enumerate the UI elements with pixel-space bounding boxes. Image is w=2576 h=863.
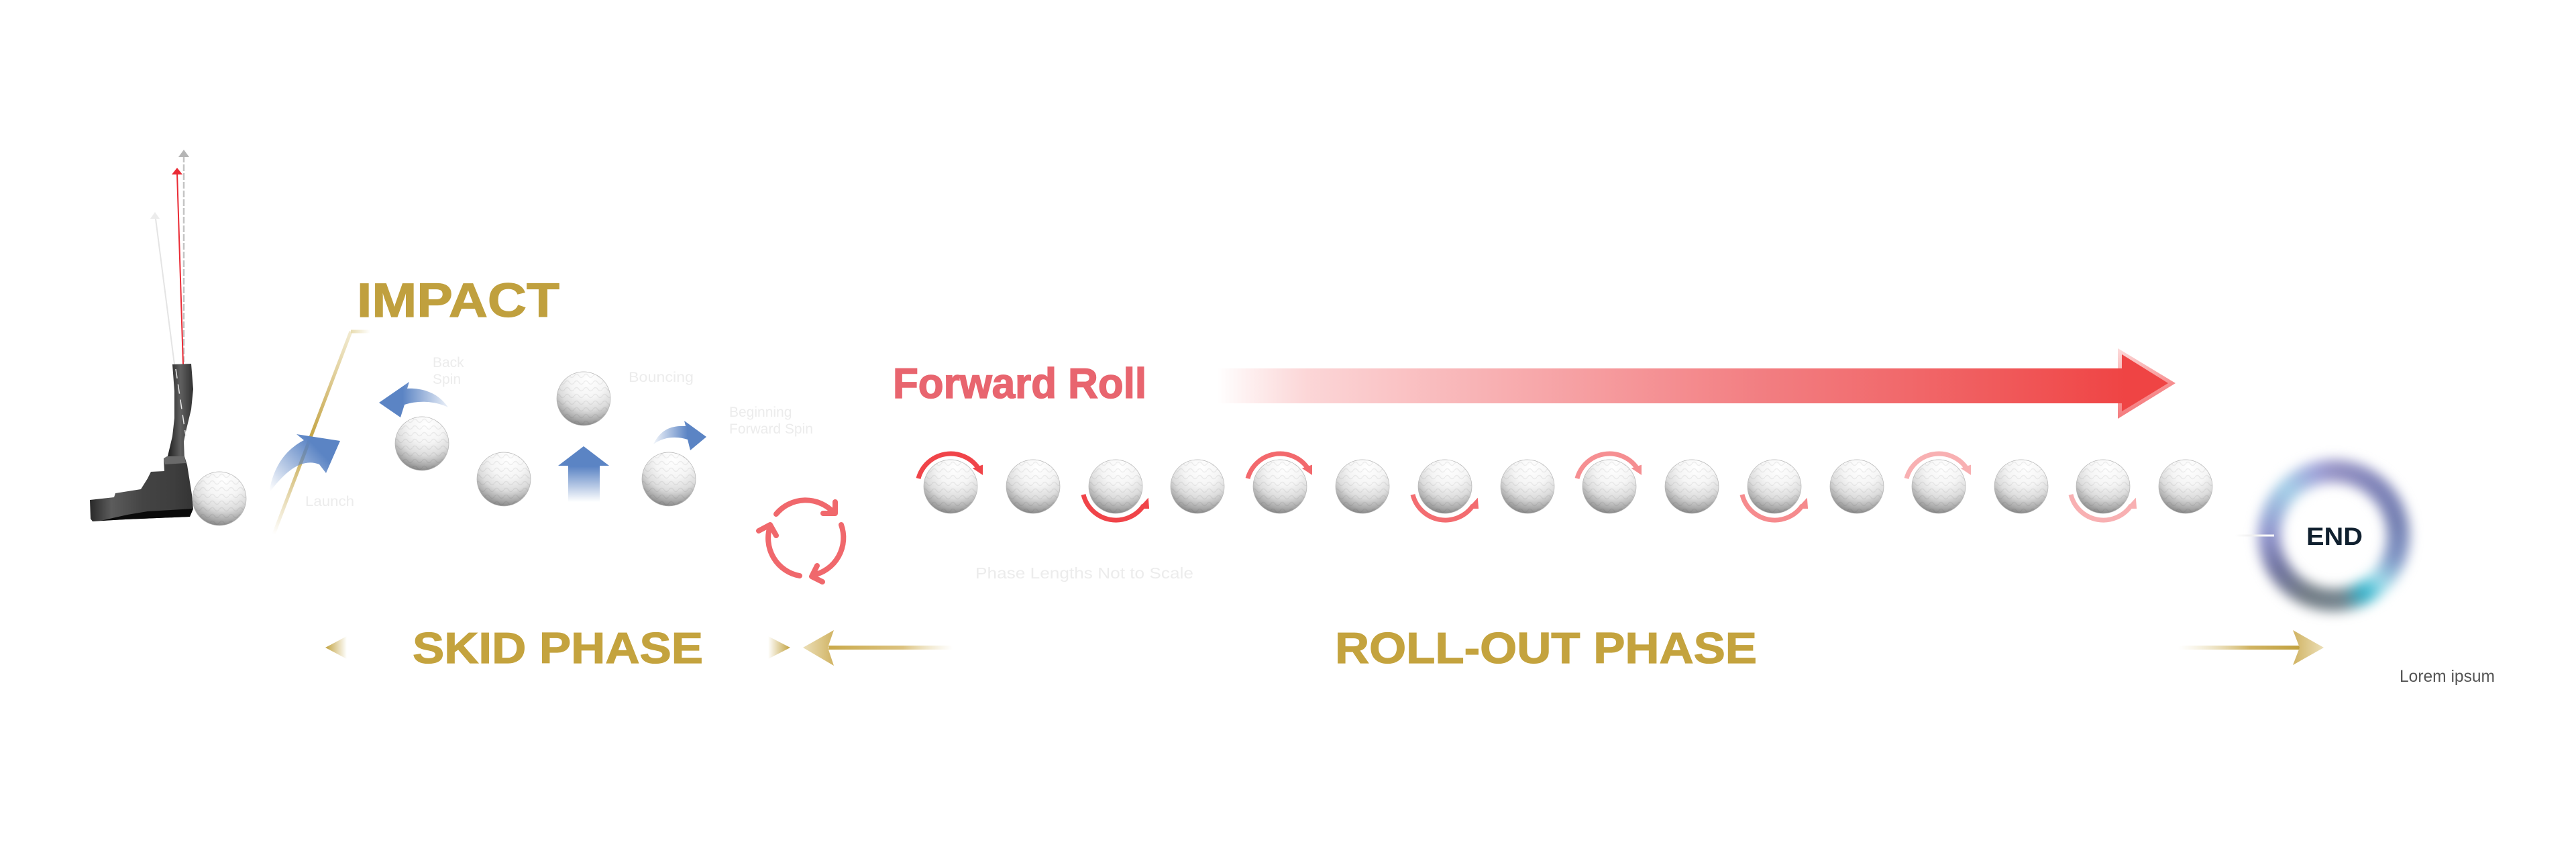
arc over ball 1	[918, 454, 982, 478]
skid phase left tip arrow	[325, 636, 347, 659]
impact heading: IMPACT	[357, 274, 559, 327]
caption: Lorem ipsum	[2400, 667, 2495, 686]
forward spin arrow	[653, 421, 706, 450]
impact leader line	[274, 332, 370, 534]
end connector line	[2235, 534, 2274, 537]
ball: back spin	[395, 417, 449, 470]
arc under ball 3	[1083, 495, 1148, 520]
launch arrow	[269, 434, 340, 493]
back spin label: Back	[433, 355, 464, 370]
roll-out phase right arrow	[2178, 630, 2324, 665]
putter	[90, 364, 193, 521]
bouncing label: Bouncing	[629, 370, 694, 385]
phase lengths note: Phase Lengths Not to Scale	[975, 564, 1193, 582]
end marker ring	[2250, 452, 2418, 620]
faint face angle arrow	[150, 212, 174, 364]
arc over ball 13	[1907, 454, 1970, 478]
skid phase balls	[395, 372, 696, 506]
arc over ball 9	[1577, 454, 1641, 478]
back spin label: Spin	[433, 372, 461, 387]
transition cycle icon	[759, 500, 843, 582]
ball: bouncing	[557, 372, 610, 425]
red start line arrow	[172, 168, 183, 364]
arc under ball 11	[1742, 495, 1807, 520]
arc under ball 15	[2071, 495, 2136, 520]
back spin arrow	[379, 382, 448, 417]
ball: on ground	[477, 452, 531, 506]
beginning forward spin label: Forward Spin	[729, 421, 813, 437]
beginning forward spin label: Beginning	[729, 405, 792, 420]
roll-out phase heading: ROLL-OUT PHASE	[1335, 623, 1757, 672]
forward roll gradient arrow	[1218, 348, 2176, 419]
gray dashed target line	[178, 150, 189, 362]
skid phase heading: SKID PHASE	[413, 623, 703, 672]
aim lines	[150, 150, 189, 364]
skid phase right tip arrow	[768, 636, 790, 659]
golf ball at address	[193, 472, 246, 525]
bounce arrow	[558, 446, 609, 502]
forward roll heading: Forward Roll	[893, 360, 1146, 407]
arc under ball 7	[1413, 495, 1478, 520]
rotation arcs	[918, 454, 2136, 520]
launch label: Launch	[305, 494, 354, 509]
roll-out phase left arrow	[803, 630, 953, 666]
end label: END	[2306, 523, 2363, 550]
arc over ball 5	[1248, 454, 1311, 478]
ball: beginning forward spin	[642, 452, 696, 506]
roll-out ball row	[924, 460, 2212, 513]
